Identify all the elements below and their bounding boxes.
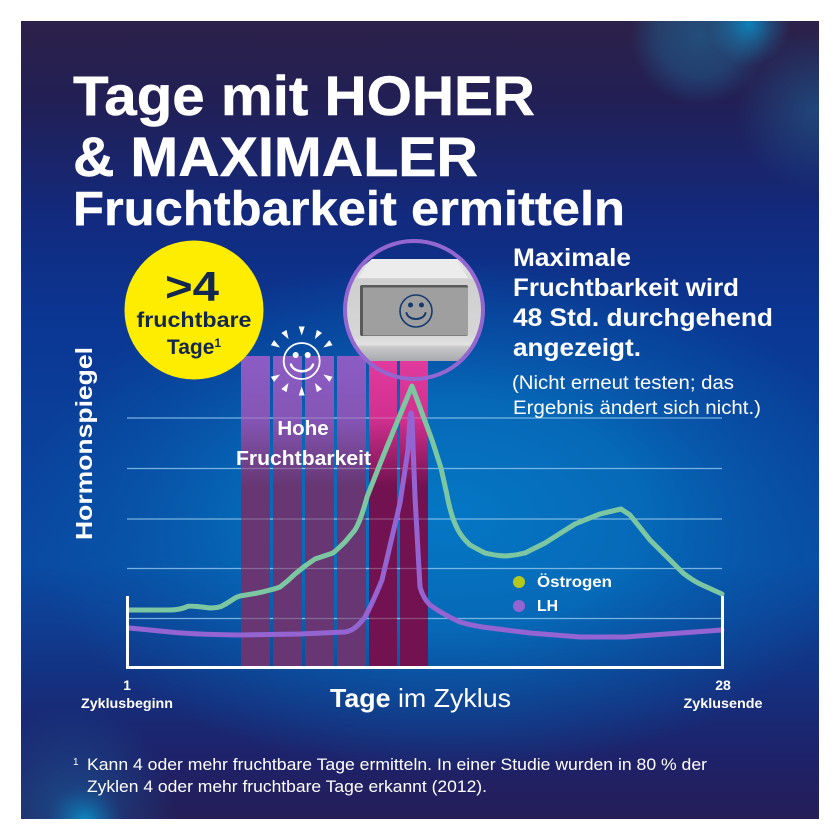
peak fertility bars	[369, 356, 428, 667]
footnote: Kann 4 oder mehr fruchtbare Tage ermitteln. In einer Studie wurden in 80 % der	[87, 756, 708, 774]
x axis labels: 28	[715, 677, 731, 693]
high fertility bars	[241, 356, 366, 667]
callout: more than 4 fertile days: >4	[165, 263, 220, 310]
footnote: 1	[73, 757, 79, 768]
icon: display smiley	[400, 295, 432, 327]
legend	[513, 572, 612, 615]
footnote	[73, 756, 708, 796]
grid lines	[127, 418, 722, 618]
text block: maximum fertility: Maximale	[513, 244, 631, 272]
title: & MAXIMALER	[73, 125, 478, 188]
icon: smiley with sun rays	[271, 326, 333, 396]
y axis label: Hormonspiegel	[71, 347, 97, 540]
line: LH	[129, 413, 722, 637]
footnote: Zyklen 4 oder mehr fruchtbare Tage erkannt (2012).	[87, 778, 487, 796]
lens: test display with smiley	[340, 241, 490, 379]
callout: more than 4 fertile days: Tage	[167, 336, 214, 359]
legend: LH	[537, 598, 558, 615]
text block: maximum fertility: angezeigt.	[513, 334, 641, 362]
line: Östrogen	[129, 386, 722, 610]
label: Hohe Fruchtbarkeit	[236, 417, 371, 470]
x axis labels: Zyklusbeginn	[81, 695, 173, 711]
label: Hohe Fruchtbarkeit: Fruchtbarkeit	[236, 447, 371, 470]
text block: maximum fertility: 48 Std. durchgehend	[513, 304, 773, 332]
callout: more than 4 fertile days: fruchtbare	[136, 309, 252, 332]
label: Hohe Fruchtbarkeit: Hohe	[277, 417, 329, 440]
text block: maximum fertility: Fruchtbarkeit wird	[513, 274, 739, 302]
callout: more than 4 fertile days	[124, 240, 264, 380]
x axis labels: Tage im Zyklus	[330, 683, 511, 713]
title: Fruchtbarkeit ermitteln	[73, 183, 625, 236]
text block: maximum fertility: Ergebnis ändert sich nicht.)	[513, 398, 761, 419]
axes	[128, 596, 722, 668]
chart: hormone levels over the cycle	[127, 356, 722, 668]
legend: Östrogen	[537, 572, 612, 591]
title	[73, 64, 625, 236]
x axis labels: Zyklusende	[684, 695, 763, 711]
title: Tage mit HOHER	[73, 64, 535, 127]
text block: maximum fertility: (Nicht erneut testen; das	[512, 373, 734, 394]
x axis labels: 1	[123, 677, 131, 693]
text block: maximum fertility	[512, 244, 773, 419]
grid lines over bars	[241, 418, 428, 618]
x axis labels	[81, 677, 763, 713]
callout: more than 4 fertile days: 1	[214, 336, 221, 350]
